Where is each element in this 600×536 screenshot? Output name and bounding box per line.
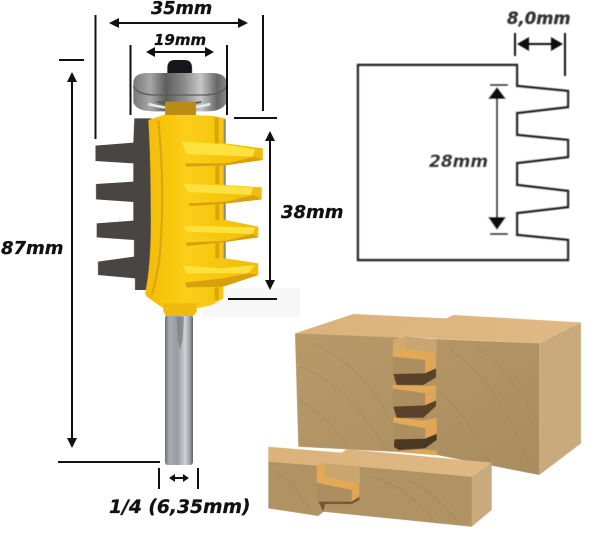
joint profile diagram xyxy=(358,9,571,260)
body relief lines xyxy=(152,121,162,295)
shank xyxy=(165,315,193,465)
large block fingers xyxy=(393,336,437,455)
dimension: 38mm xyxy=(228,118,344,299)
dimension: 19mm: 19mm xyxy=(154,31,206,49)
dimension: 28mm xyxy=(429,85,508,234)
bit neck xyxy=(165,102,196,117)
dimension: 38mm: 38mm xyxy=(281,202,344,223)
dimension: 35mm xyxy=(96,0,263,139)
wooden finger joint illustration xyxy=(268,314,581,527)
yellow cutter body xyxy=(145,115,263,310)
router bit photo xyxy=(95,60,263,465)
dimension: 19mm xyxy=(130,31,227,115)
profile outline xyxy=(358,65,568,260)
dimension: 87mm: 87mm xyxy=(1,238,64,259)
large wood block xyxy=(295,314,581,475)
dimension: 28mm: 28mm xyxy=(429,152,488,172)
background haze behind router bit xyxy=(203,288,300,317)
yellow collar xyxy=(163,303,197,316)
small wood block xyxy=(268,447,492,527)
dark carbide cutter xyxy=(95,118,152,290)
dimension: 8,0mm xyxy=(507,9,571,76)
dimension: 8,0mm: 8,0mm xyxy=(507,9,571,28)
bearing xyxy=(133,73,227,111)
bolt xyxy=(167,60,192,74)
dimension: shank diameter xyxy=(109,468,250,518)
dimension: 87mm xyxy=(1,60,160,462)
dimension: shank diameter: 1/4 (6,35mm) xyxy=(109,497,250,518)
yellow teeth xyxy=(182,142,263,287)
